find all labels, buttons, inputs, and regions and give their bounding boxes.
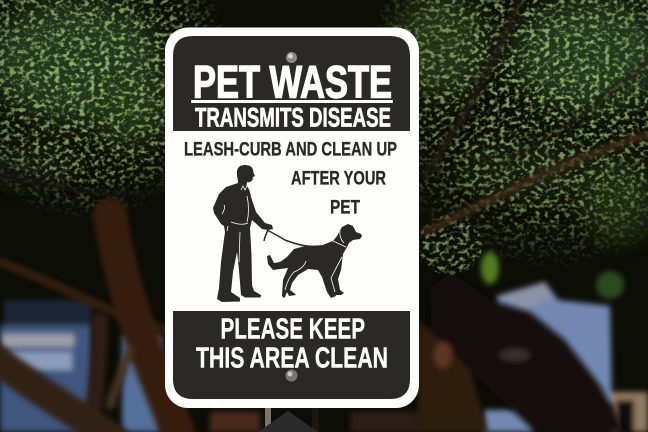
instruction text <box>184 138 397 218</box>
icon: leash <box>264 230 338 246</box>
icon: person walking dog on a leash <box>213 165 362 302</box>
blurred backdrop: blue buildings and ground <box>0 252 648 432</box>
sign post bracket <box>258 405 319 432</box>
bottom black panel <box>173 311 410 399</box>
top black panel <box>173 36 410 132</box>
foliage: upper left canopy <box>0 0 168 183</box>
instruction text: PET <box>330 196 360 218</box>
icon: dog <box>267 224 362 298</box>
heading: pet waste: PET WASTE <box>193 56 392 108</box>
branches in upper background <box>0 0 648 330</box>
instruction text: AFTER YOUR <box>291 168 386 190</box>
icon: person <box>213 165 273 302</box>
icon: person clothing highlights <box>222 186 248 262</box>
sign white board <box>165 28 419 408</box>
foliage: upper right canopy <box>395 0 648 240</box>
tree canopy texture <box>0 0 648 275</box>
bottom black panel: THIS AREA CLEAN <box>196 342 388 374</box>
right tree trunk <box>418 272 625 432</box>
top bolt <box>286 52 297 63</box>
bottom bolt <box>286 370 298 382</box>
sign <box>165 28 419 408</box>
instruction text: LEASH-CURB AND CLEAN UP <box>184 138 397 160</box>
closing message: PLEASE KEEP <box>220 314 365 346</box>
left tree trunks <box>0 215 178 432</box>
icon: dog highlights <box>285 231 346 292</box>
subheading: transmits disease: TRANSMITS DISEASE <box>195 102 391 132</box>
